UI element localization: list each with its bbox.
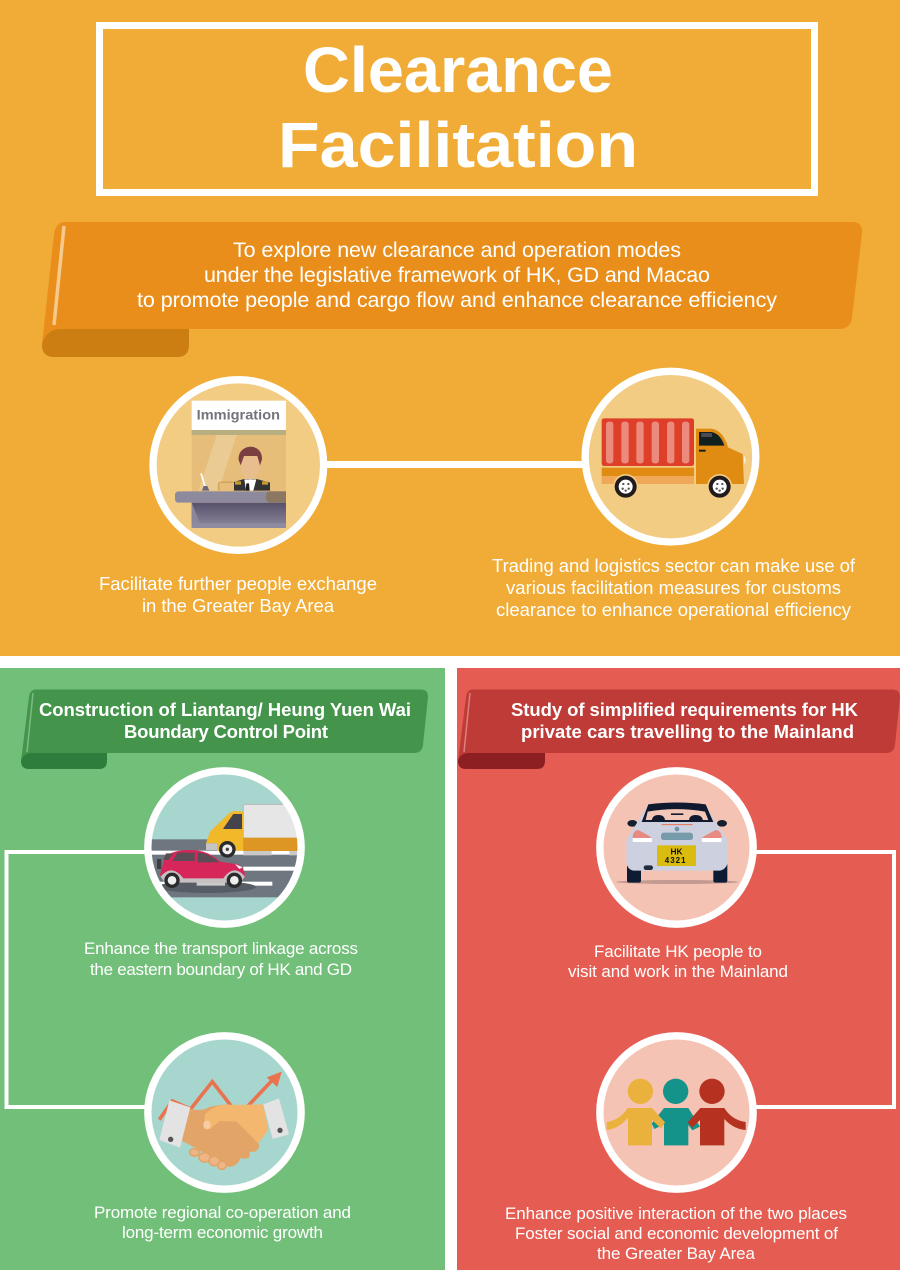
text: trading and logistics: clearance to enhance operational efficiency (496, 599, 852, 620)
panel: simplified requirements for private cars (457, 668, 900, 1270)
text: people exchange: Facilitate further people exchange (99, 573, 377, 594)
banner: private cars (458, 690, 900, 769)
banner: main objective: under the legislative framework of HK, GD and Macao (204, 263, 710, 287)
icon: immigration counter (153, 380, 324, 550)
text: regional co-operation (94, 1203, 351, 1242)
text: visit and work: Facilitate HK people to (594, 942, 762, 961)
icon: immigration counter: Immigration (197, 408, 280, 423)
connector line between top icons (325, 461, 585, 468)
text: trading and logistics: various facilitation measures for customs (506, 577, 841, 598)
text: positive interaction: Foster social and economic development of (515, 1224, 838, 1243)
text: people exchange: in the Greater Bay Area (142, 595, 335, 616)
icon: car rear with HK plate: 4321 (665, 856, 687, 865)
text: visit and work (568, 942, 788, 981)
text: transport linkage: the eastern boundary of HK and GD (90, 960, 352, 979)
banner: private cars: private cars travelling to the Mainland (521, 721, 854, 742)
connector lines left (6, 852, 146, 1107)
text: transport linkage (84, 939, 358, 979)
text: visit and work: visit and work in the Mainland (568, 962, 788, 981)
title: Clearance (303, 34, 613, 106)
banner: main objective: to promote people and cargo flow and enhance clearance efficiency (137, 288, 777, 312)
panel: Liantang Heung Yuen Wai (0, 668, 445, 1270)
icon: three people holding hands (600, 1036, 753, 1189)
connector lines right (755, 852, 894, 1107)
text: positive interaction: the Greater Bay Area (597, 1244, 756, 1263)
banner: private cars: Study of simplified requirements for HK (511, 699, 859, 720)
icon: car rear with HK plate (600, 771, 753, 924)
icon: delivery truck (585, 371, 756, 542)
icon: car rear with HK plate: HK (670, 847, 683, 857)
panel: clearance facilitation header (0, 0, 900, 656)
text: positive interaction (505, 1204, 847, 1263)
banner: Liantang (21, 690, 428, 769)
banner: main objective (42, 222, 862, 357)
text: people exchange (99, 573, 377, 616)
title: Facilitation (278, 109, 638, 181)
text: trading and logistics (492, 555, 856, 620)
text: positive interaction: Enhance positive interaction of the two places (505, 1204, 847, 1223)
banner: main objective: To explore new clearance and operation modes (233, 238, 681, 262)
banner: Liantang: Boundary Control Point (124, 721, 328, 742)
text: trading and logistics: Trading and logistics sector can make use of (492, 555, 856, 576)
icon: truck and car on road (143, 770, 303, 927)
title (100, 26, 814, 192)
icon: handshake and growth arrow (148, 1036, 301, 1189)
text: regional co-operation: Promote regional co-operation and (94, 1203, 351, 1222)
text: regional co-operation: long-term economic growth (122, 1223, 323, 1242)
banner: Liantang: Construction of Liantang/ Heung Yuen Wai (39, 699, 411, 720)
text: transport linkage: Enhance the transport linkage across (84, 939, 358, 958)
